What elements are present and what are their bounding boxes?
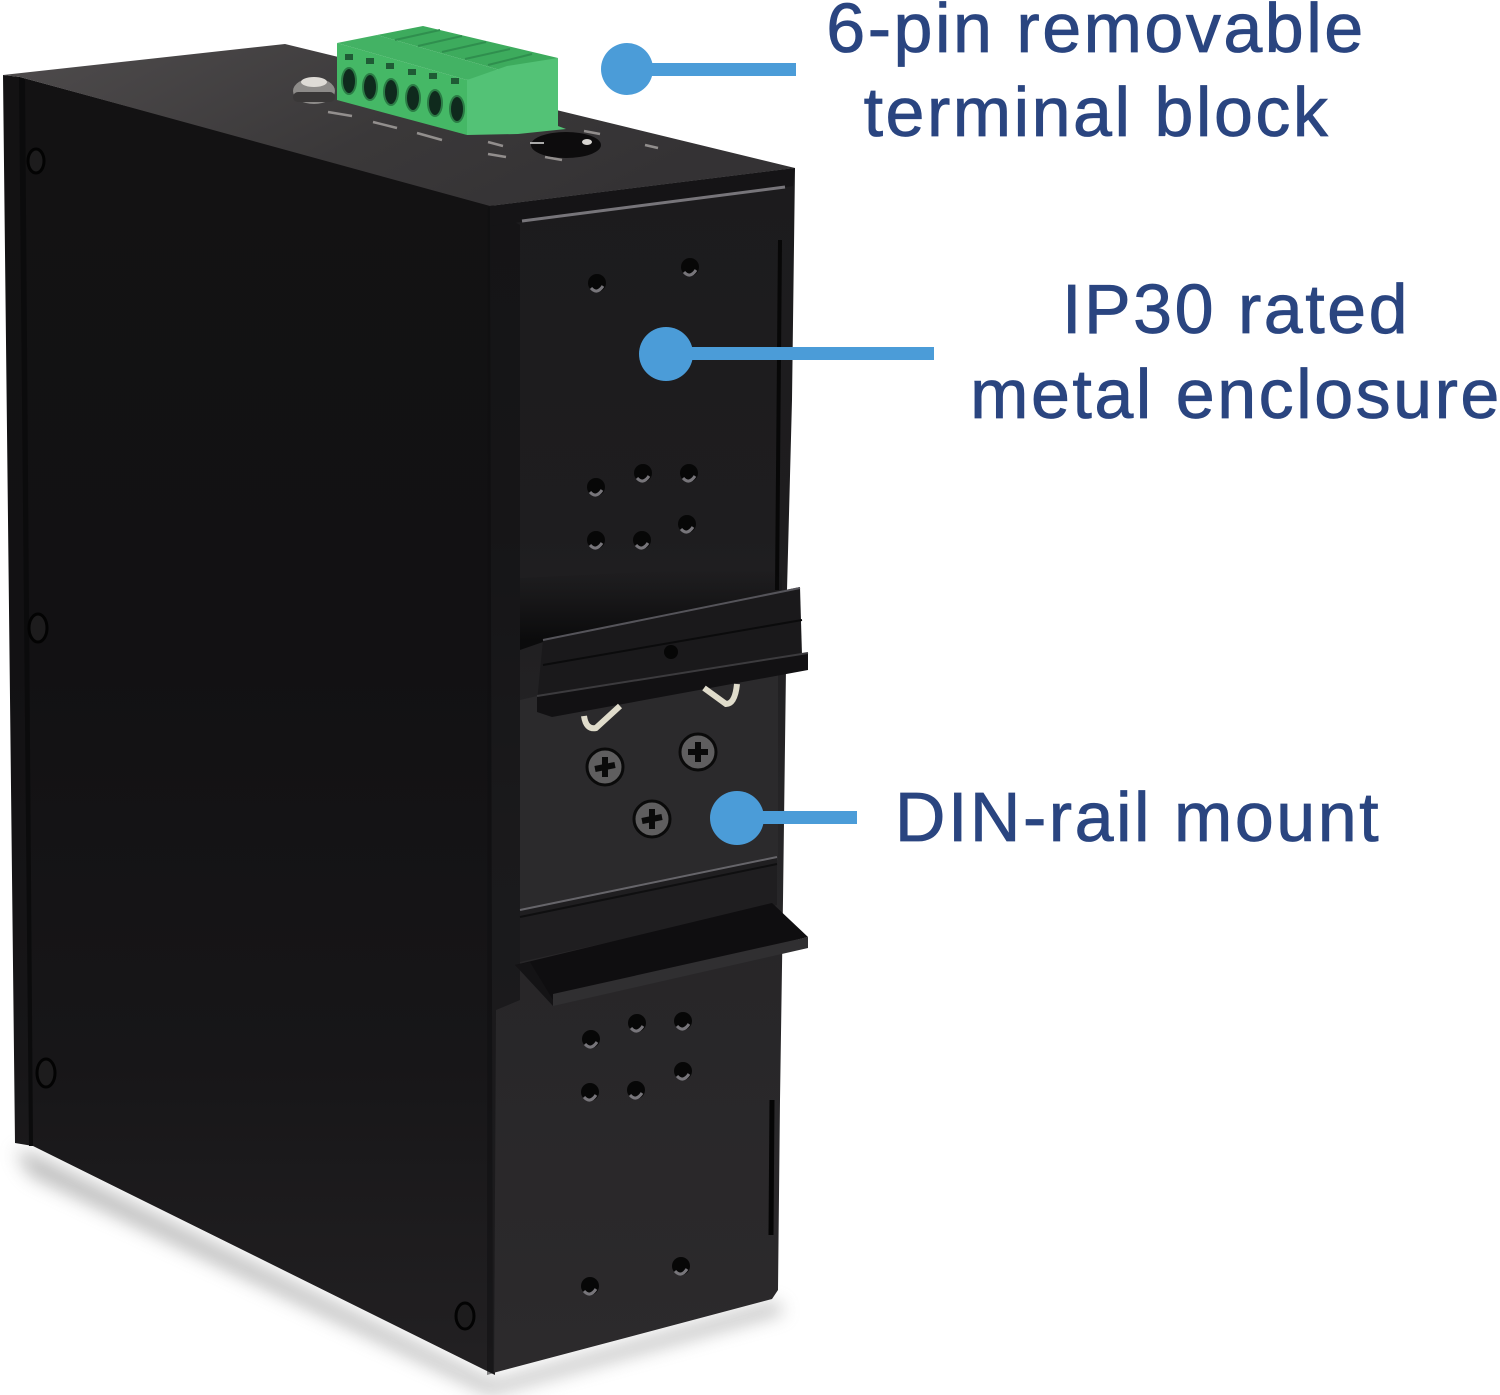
DIN rail mount <box>515 587 808 1006</box>
callout marker <box>601 43 796 95</box>
top panel markings <box>328 112 658 160</box>
callout: terminal block <box>601 0 1366 151</box>
label: DIN-rail mount <box>895 778 1381 856</box>
left panel screws <box>28 149 474 1329</box>
right front panel <box>490 168 795 1373</box>
terminal block <box>337 26 566 135</box>
lower rail clip <box>515 903 808 1000</box>
block slope <box>337 35 507 80</box>
right slot upper <box>777 240 780 590</box>
lip highlight <box>522 187 785 221</box>
label: IP30 rated <box>1062 270 1410 348</box>
label: metal enclosure <box>970 355 1500 433</box>
label: terminal block <box>864 73 1330 151</box>
spring clip left <box>584 706 620 728</box>
right slot lower <box>771 1100 772 1235</box>
left side panel <box>3 75 495 1375</box>
upper rail flange <box>537 653 808 717</box>
callout marker <box>639 327 934 381</box>
top screw <box>293 77 335 104</box>
block side <box>467 58 566 135</box>
rail hole <box>664 645 678 659</box>
top panel <box>3 44 795 206</box>
top recessed port <box>530 132 601 158</box>
vent holes <box>581 258 699 1295</box>
spring clip right <box>704 684 737 704</box>
lower rail body <box>520 857 777 962</box>
mount plate <box>520 640 778 935</box>
left flange groove <box>19 77 33 1146</box>
mount screws <box>587 734 716 837</box>
front bend shadow <box>487 207 520 1375</box>
device: industrial switch <box>3 26 808 1394</box>
callout: DIN-rail mount <box>710 778 1381 856</box>
block rear deck <box>377 26 558 72</box>
upper rail body <box>537 587 802 702</box>
ground shadow <box>15 1150 785 1394</box>
shadow above rail <box>520 565 782 650</box>
callout: metal enclosure <box>639 270 1500 433</box>
block front <box>337 43 467 135</box>
front top lip <box>490 168 795 226</box>
callout marker <box>710 791 857 845</box>
